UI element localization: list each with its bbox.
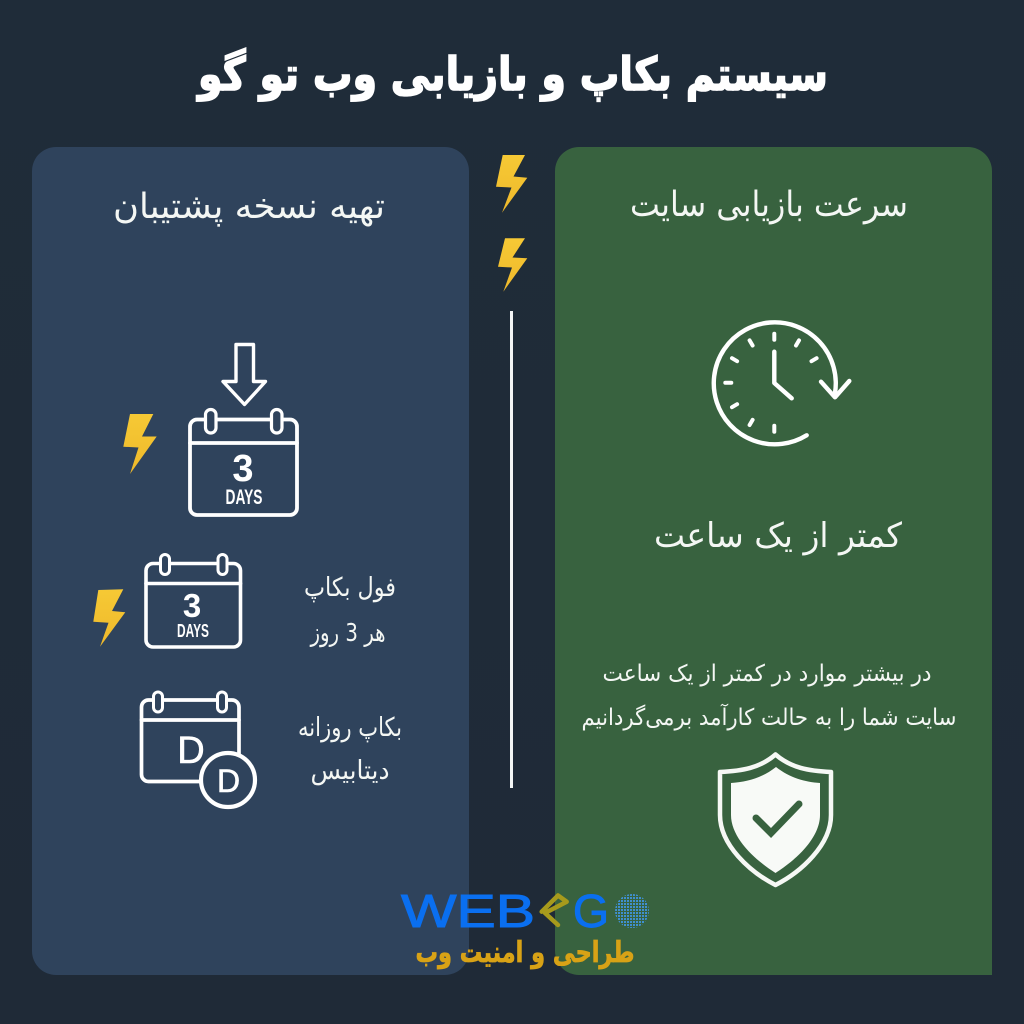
icon: second center bolt (498, 238, 527, 292)
icon: small calendar 3 days (146, 554, 240, 647)
logo letter G: G (573, 885, 609, 937)
panel: backup (32, 147, 469, 975)
icon: daily database calendar: D (217, 763, 240, 799)
logo tagline: طراحی و امنیت وب (416, 935, 634, 969)
icon: daily database calendar: D (177, 730, 205, 772)
icon: shield with check (720, 754, 831, 885)
icon: small calendar 3 days: 3 (183, 587, 201, 624)
center divider (510, 311, 513, 788)
text: daily backup line 2: دیتابیس (310, 756, 390, 786)
icon: bolt beside small calendar (93, 589, 125, 647)
icon: top center bolt (496, 155, 527, 213)
logo globe (615, 894, 649, 928)
logo word WEB: WEB (401, 885, 535, 937)
icon: small calendar 3 days: DAYS (177, 621, 209, 641)
panel background: backup (32, 147, 469, 975)
icon: large calendar 3 days: 3 (232, 448, 254, 490)
icon: large calendar 3 days: DAYS (226, 486, 262, 509)
subheading: under one hour: کمتر از یک ساعت (654, 516, 903, 556)
title: سیستم بکاپ و بازیابی وب تو گو (196, 47, 828, 101)
heading: backup: تهیه نسخه پشتیبان (113, 187, 385, 227)
text: full backup line 1: فول بکاپ (304, 573, 396, 603)
text: description line 2: سایت شما را به حالت کارآمد برمی‌گردانیم (582, 703, 956, 731)
icon: bolt beside large calendar (123, 414, 157, 474)
panel: recovery speed (555, 147, 992, 975)
panel background: recovery (555, 147, 992, 975)
icon: clock with arrow (714, 322, 849, 444)
heading: recovery speed: سرعت بازیابی سایت (630, 185, 908, 225)
text: full backup line 2: هر 3 روز (309, 618, 386, 648)
text: daily backup line 1: بکاپ روزانه (298, 713, 402, 743)
icon: large calendar 3 days (190, 410, 297, 515)
icon: down arrow (223, 344, 266, 404)
logo: WEB2GO (401, 885, 649, 937)
logo numeral 2 (542, 896, 567, 925)
text: description line 1: در بیشتر موارد در کمتر از یک ساعت (602, 661, 932, 687)
icon: daily database calendar (142, 692, 255, 807)
